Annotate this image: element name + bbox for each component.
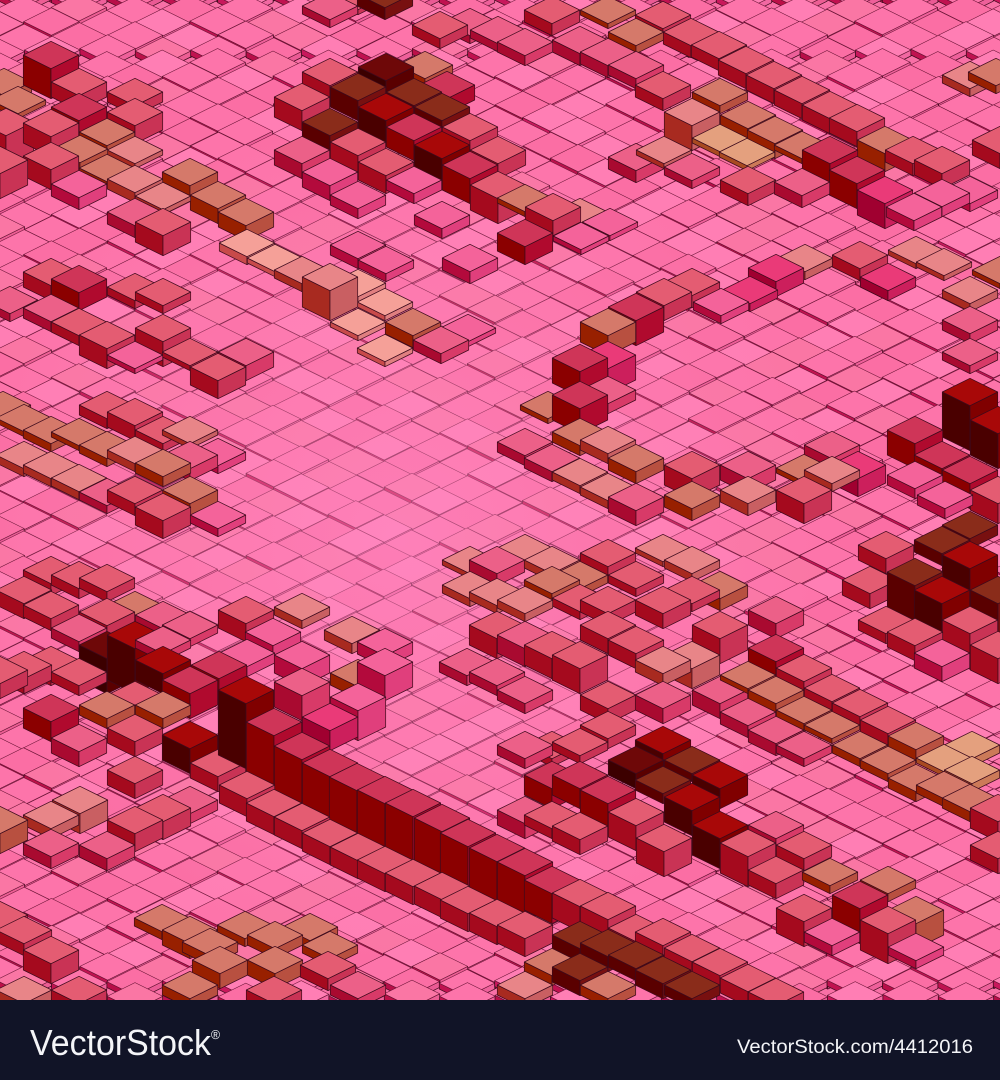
stepped ridge center right <box>497 236 1000 526</box>
bottom left cube mass <box>0 556 413 871</box>
top band ridge <box>302 0 1000 231</box>
brown strip bottom center <box>497 914 804 1016</box>
dark cube cluster top center <box>274 51 638 284</box>
rosy cube group mid left <box>0 258 274 399</box>
salmon cluster bottom left <box>0 901 386 1014</box>
tan diagonal band lower right <box>720 654 1000 874</box>
salmon band left middle <box>0 391 246 539</box>
footer bar <box>0 1000 1000 1080</box>
image id url: VectorStock.com/4412016 <box>737 1037 973 1058</box>
salmon cluster center <box>439 534 804 724</box>
dark cubes right edge <box>842 511 1000 684</box>
brand wordmark: ® <box>211 1027 220 1042</box>
dark cluster bottom center <box>497 711 944 969</box>
long red wall <box>218 676 636 940</box>
brand wordmark: VectorStock <box>30 1022 222 1063</box>
salmon cubes top left <box>0 41 496 367</box>
low red step row <box>219 771 553 957</box>
